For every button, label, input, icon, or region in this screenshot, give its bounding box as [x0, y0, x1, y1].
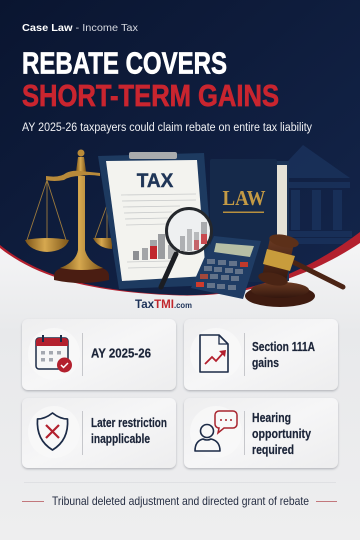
panel: Hearing opportunity required: Hearing: [252, 410, 291, 425]
title: REBATE COVERS: [22, 46, 227, 80]
icon: magnifying glass: [161, 208, 212, 287]
title: [22, 46, 279, 113]
icon: tax clipboard: TAX: [137, 171, 174, 192]
background courthouse: [272, 145, 356, 244]
title: SHORT-TERM GAINS: [22, 79, 279, 113]
panel: Later restriction inapplicable: Later restriction: [91, 415, 167, 430]
panel: Section 111A gains: [184, 319, 338, 390]
icon: law book: LAW: [222, 186, 266, 210]
panel: Hearing opportunity required: opportunity: [252, 426, 312, 441]
icon: calculator: [191, 236, 261, 299]
icon: document with rising chart: [190, 328, 242, 380]
panel: Section 111A gains: Section 111A: [252, 339, 315, 354]
kicker: Case Law - Income Tax: [22, 22, 139, 34]
panel: AY 2025-26: [22, 319, 176, 390]
red curved band: [0, 232, 360, 305]
panel: AY 2025-26: AY 2025-26: [91, 346, 151, 360]
panel: Later restriction inapplicable: inapplicable: [91, 431, 150, 446]
dark header background: [0, 0, 360, 310]
panel: Later restriction inapplicable: [22, 398, 176, 468]
panel: Section 111A gains: gains: [252, 355, 279, 370]
icon: person with speech bubble: [190, 406, 242, 458]
icon: scales of justice: [25, 150, 112, 283]
subtitle: AY 2025-26 taxpayers could claim rebate on entire tax liability: [22, 122, 312, 134]
bar chart: [133, 234, 175, 260]
footer conclusion: Tribunal deleted adjustment and directed grant of rebate: [52, 494, 309, 508]
panel: Hearing opportunity required: required: [252, 442, 294, 457]
icon: gavel: [245, 232, 343, 307]
icon: shield with cross: [28, 406, 80, 458]
icon: law book: [210, 159, 289, 282]
icon: calendar with check: [28, 328, 80, 380]
icon: tax clipboard: [98, 152, 214, 289]
logo: TaxTMI.com: TaxTMI.com: [135, 297, 192, 311]
panel: Hearing opportunity required: [184, 398, 338, 468]
light lower background: [0, 243, 360, 540]
